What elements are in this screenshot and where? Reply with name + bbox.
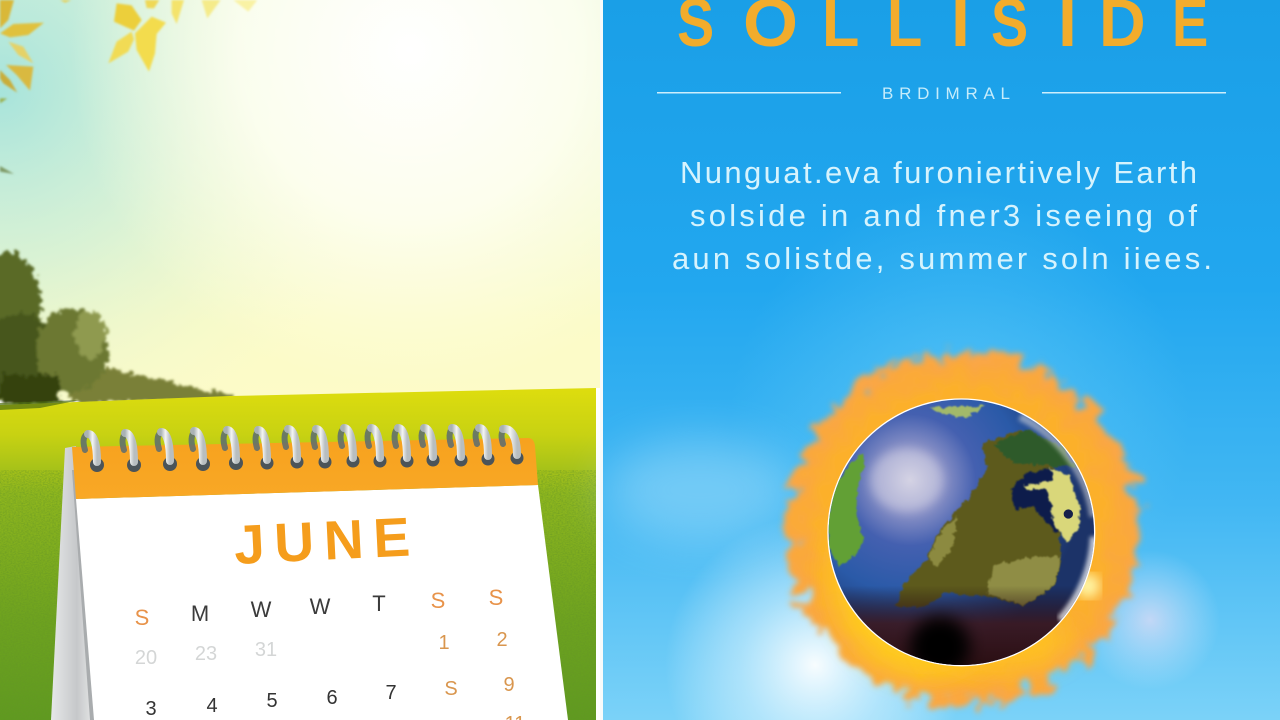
date numbers: 6 [326, 687, 338, 709]
description text: aun solistde, summer soln iiees. [672, 241, 1212, 276]
weekday labels: M [191, 601, 209, 626]
divider line left [657, 92, 841, 94]
calendar page [76, 485, 568, 720]
title [677, 0, 1208, 61]
icon: Earth globe [827, 397, 1097, 677]
panel divider [600, 0, 603, 720]
date numbers: 3 [145, 698, 157, 720]
weekday labels: T [372, 591, 386, 616]
spiral binding [84, 428, 524, 472]
panel: summer landscape [0, 0, 600, 720]
southern highlands [987, 557, 1062, 605]
weekday labels: S [431, 588, 445, 613]
calendar back pages [51, 446, 98, 720]
divider line right [1042, 92, 1226, 94]
month heading: JUNE [233, 505, 411, 576]
blue background [603, 0, 1280, 720]
main continent [895, 430, 1062, 608]
edge dimming [1020, 417, 1093, 517]
date numbers: 5 [266, 690, 278, 712]
icon: sunlit leaves [0, 0, 257, 174]
forest north [993, 430, 1077, 467]
subtitle: BRDIMRAL [882, 84, 1010, 103]
white panel gap [596, 388, 600, 400]
date numbers: 1 [438, 632, 450, 654]
icon: burning sun corona [787, 352, 1139, 704]
grass field [0, 388, 596, 720]
yellow peninsula [1023, 468, 1080, 542]
trees on the horizon [0, 252, 108, 406]
date numbers: 20 [135, 647, 157, 669]
calendar [51, 428, 568, 720]
date numbers: 2 [496, 629, 508, 651]
north polar land [930, 405, 987, 417]
description text: solside in and fner3 iseeing of [690, 198, 1197, 233]
description text: Nunguat.eva furoniertively Earth [680, 155, 1197, 190]
cloud highlight [870, 448, 943, 512]
weekday labels: S [135, 605, 149, 630]
date numbers: 4 [206, 695, 218, 717]
date numbers: S [444, 678, 458, 700]
night shadow [842, 588, 1079, 665]
date numbers: 7 [385, 682, 397, 704]
panel: solstice explanation [603, 0, 1280, 720]
western coast highlight [928, 517, 957, 567]
calendar orange header [72, 438, 538, 499]
weekday labels: S [489, 585, 503, 610]
date numbers: 9 [503, 674, 515, 696]
weekday labels [135, 585, 503, 630]
ocean [827, 397, 1097, 667]
inland sea [1010, 467, 1060, 534]
sky background [0, 0, 600, 400]
weekday labels: W [310, 594, 331, 619]
date numbers [135, 629, 525, 720]
western continent [827, 453, 865, 567]
distant treeline [70, 368, 232, 402]
description text [672, 155, 1212, 276]
date numbers: 23 [195, 643, 217, 665]
date numbers: 31 [255, 639, 277, 661]
weekday labels: W [251, 597, 272, 622]
